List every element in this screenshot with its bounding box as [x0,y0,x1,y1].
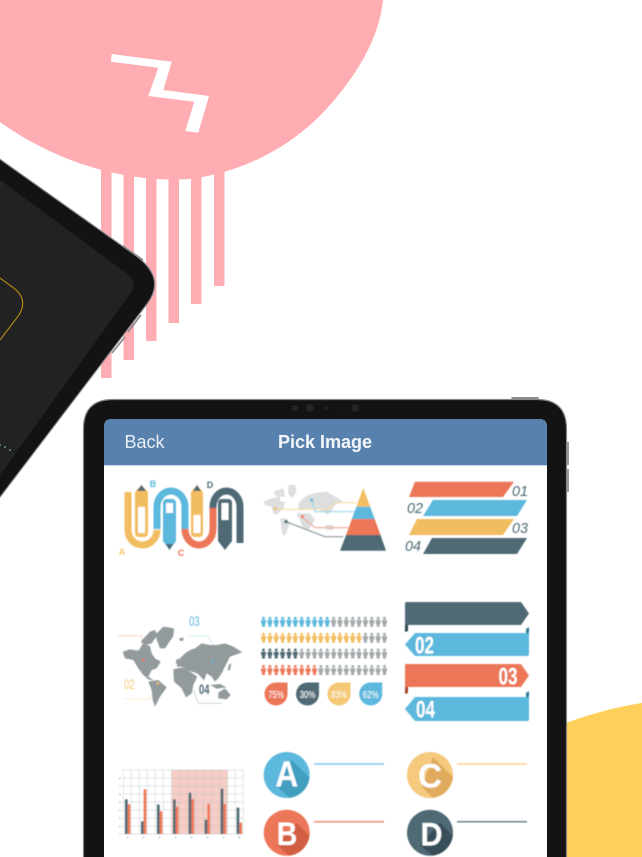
thumbnail: pencil snake [119,479,240,558]
thumbnail: slanted labels: 02 [407,500,424,517]
thumbnail: bar chart: 4 [174,836,176,840]
people row 3 [261,648,387,658]
navigation bar [104,419,547,466]
thumbnail: bar chart: 6 [119,793,121,797]
thumbnail: pencil snake: A [119,547,126,557]
thumbnail: ribbons: 04 [416,696,435,724]
circle B [263,809,310,856]
thumbnail: slanted labels: 01 [512,483,528,500]
icon: white zigzag [111,54,209,133]
thumbnail: pencil snake: C [178,548,185,558]
back button: Back [124,432,166,452]
circle A [263,751,310,799]
people row 1 [261,617,387,627]
thumbnail: bar chart [119,770,243,840]
thumbnail: world map [118,614,242,707]
circle C [406,751,454,799]
thumbnail: ribbons [405,602,529,724]
thumbnail: bar chart: 1 [119,833,121,837]
thumbnail: ribbons: 03 [498,664,518,690]
thumbnail: ribbons: 02 [415,632,434,660]
thumbnail: bar chart: 8 [238,836,240,840]
circle D: D [420,817,442,853]
nav title: Pick Image [278,432,372,452]
thumbnail: bar chart: 7 [119,785,121,789]
thumbnail: bar chart: 4 [119,809,121,813]
yellow corner shape [560,703,642,857]
thumbnail: bar chart: 1 [126,836,128,840]
circle B: B [277,816,297,852]
percentage badges: 75% [268,689,284,701]
thumbnail: map and pyramid [263,485,386,551]
thumbnail: bar chart: 5 [119,801,121,805]
rotated tablet [0,155,155,505]
main tablet frame [84,397,569,857]
thumbnail: slanted labels: 03 [512,520,529,537]
thumbnail: bar chart: 5 [190,836,192,840]
circle C: C [418,758,442,796]
thumbnail: world map: 04 [199,682,210,697]
thumbnail: world map: 02 [124,677,134,692]
percentage badges: 62% [363,689,379,701]
thumbnail: bar chart: 8 [119,777,121,781]
percentage badges: 83% [331,689,347,701]
thumbnail: slanted labels: 04 [405,538,421,555]
thumbnail: world map: 03 [189,614,200,629]
thumbnail: bar chart: 7 [222,836,224,840]
circle A: A [275,754,298,795]
thumbnail: bar chart: 6 [206,836,208,840]
percentage badges: 30% [300,689,315,701]
thumbnail: slanted labels [405,482,529,555]
people row 4 [261,665,387,675]
thumbnail: people chart [261,617,387,706]
thumbnail: bar chart: 2 [142,836,144,840]
pink blob with stripes [0,0,383,378]
people row 2 [261,633,387,643]
thumbnail: bar chart: 3 [158,836,160,840]
circle D [406,809,454,856]
thumbnail: pencil snake: D [207,480,214,490]
percentage badges [264,682,382,706]
thumbnail: bar chart: 3 [119,817,121,821]
thumbnail: pencil snake: B [150,479,157,489]
thumbnail: lettered circles [264,752,527,857]
thumbnail: bar chart: 2 [119,825,121,829]
